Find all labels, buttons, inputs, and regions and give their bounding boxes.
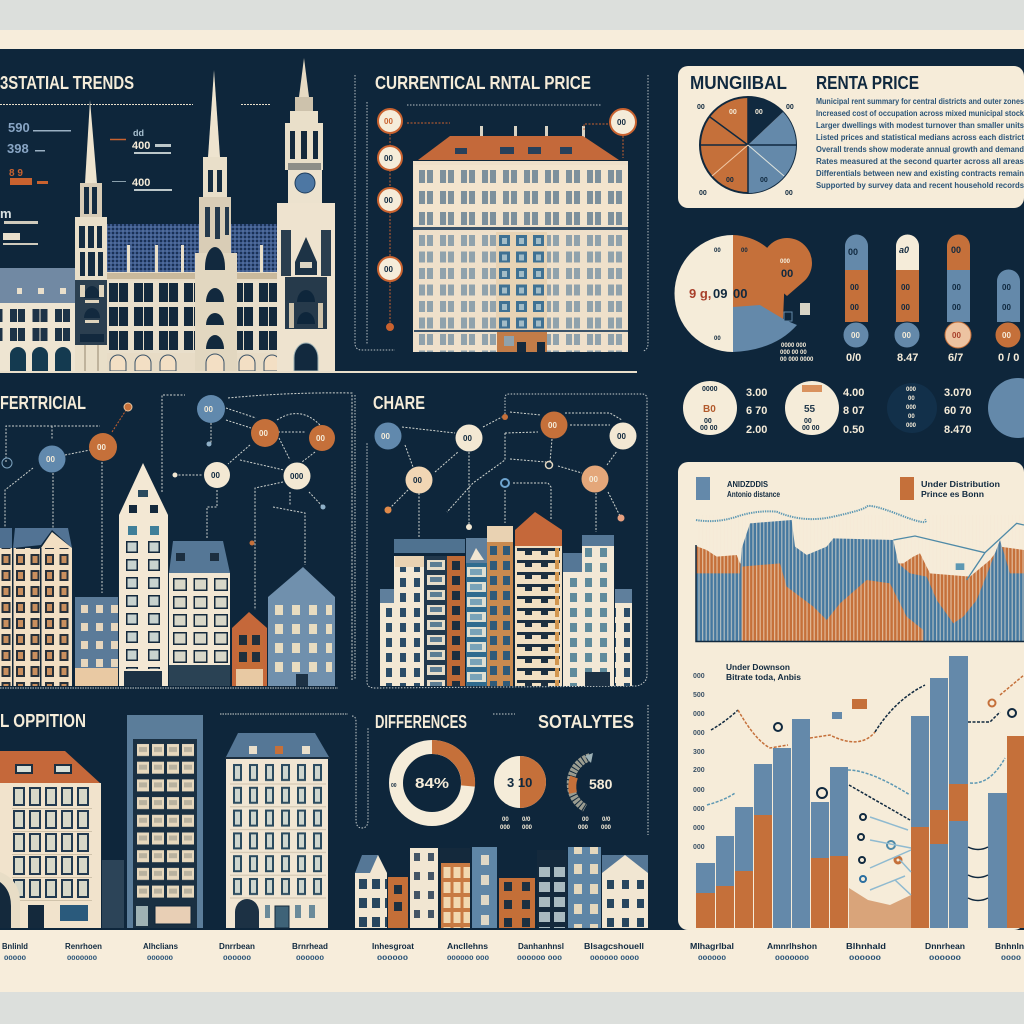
network nodes: 00 [381,432,390,441]
large pie chart: 00 [714,248,721,254]
divider [0,371,637,373]
heading: rental price: RENTA PRICE [816,73,919,93]
y axis labels [693,673,705,851]
network lines [5,393,352,680]
footer captions: 000000 [929,956,962,962]
large pie chart: 00 [733,286,747,301]
y axis labels: 200 [693,767,705,774]
footer captions: Dnnrhean [925,942,965,951]
small dark annex [102,860,124,928]
stat circle 1 [683,381,767,436]
callout markers [378,109,636,330]
pie chart: 00 [697,104,705,111]
mini skyline [355,847,648,928]
network nodes: 00 [316,434,325,443]
chart sub heading [726,663,802,682]
skyline: center buildings [380,512,632,686]
callout markers: 00 [384,265,393,274]
half pie chart: 3 10 [507,775,532,790]
y axis labels: 000 [693,844,705,851]
pill chart 3: 00 [952,331,961,340]
donut chart: 00 [391,783,397,789]
network nodes: 00 [46,455,55,464]
stacked bar chart [696,656,1024,928]
pill chart 4 [995,270,1021,364]
large pie chart: 00 [741,248,748,254]
pill chart 4: 00 [1002,303,1011,312]
large pie chart: 0000 000 [781,343,807,349]
stat circle 1: 0000 [702,386,718,393]
skyline: left buildings [0,463,338,688]
stat circle 3: 00 [908,396,915,402]
stat circle 2: 00 00 [802,425,820,432]
stat circle 1: 00 00 [700,425,718,432]
footer captions: Bnhnln [995,942,1024,951]
footer captions: Mlhagrlbal [690,942,734,951]
paragraph: Rates measured at the second quarter across all areas [816,157,1024,166]
stat list: 8 9 [9,168,23,179]
panel: estatal trends [0,58,637,373]
chart sub heading: Bitrate toda, Anbis [726,673,802,682]
middle tower [195,70,237,372]
footer captions: Blhnhald [846,942,886,951]
pill chart 4: 00 [1002,283,1011,292]
frame lines [352,714,515,828]
icon: clock [295,173,315,193]
paragraph [816,97,1024,190]
stat list: m [0,206,12,221]
stripe overlay [696,515,1024,641]
y axis labels: 000 [693,730,705,737]
stat circle 3: 60 70 [944,405,972,417]
large pie chart: 9 g, [689,286,711,301]
pill chart 4: 00 [1002,331,1011,340]
callout markers: 00 [617,118,626,127]
legend: Under Distribution [921,480,1000,489]
large pie chart [674,235,814,363]
panel: current rental price [355,73,648,352]
footer captions: Inhesgroat [372,942,414,951]
stat circle 1: 3.00 [746,387,767,399]
stat circle 3: 000 [906,423,917,429]
pill chart 2 [894,234,920,364]
footer captions: 000000 [223,956,252,962]
pie chart: 00 [699,190,707,197]
footer captions: 000000 000 [447,956,490,962]
panel: differences and totals [352,705,648,928]
pie chart: 00 [760,177,768,184]
heading: opposition: L OPPITION [0,711,86,731]
stat circle 2: 8 07 [843,405,864,417]
trend markers [774,699,1016,900]
y axis labels: 500 [693,692,705,699]
network nodes: 00 [204,405,213,414]
pill chart 2: 00 [901,283,910,292]
half pie chart [494,756,546,831]
callout markers: 00 [384,196,393,205]
pill chart 2: 8.47 [897,352,918,364]
footer captions: Ancllehns [447,942,489,951]
network nodes: 00 [413,476,422,485]
frame lines [355,394,647,688]
dashed line [220,713,348,715]
y axis labels: 000 [693,673,705,680]
panel: municipal rental price [678,66,1024,208]
legend: ANIDZDDIS [727,480,769,489]
central apartment block [413,126,628,352]
footer captions: Danhanhnsl [518,942,564,951]
legend: Antonio distance [727,490,780,499]
stat list: 400 [132,177,150,189]
pill chart 1: 00 [850,283,859,292]
footer captions: 000000 [147,956,174,962]
stat circle 2: 4.00 [843,387,864,399]
footer captions: 000000 [698,956,727,962]
pie chart [697,97,796,197]
network nodes: 000 [290,472,304,481]
stat circle 1: 2.00 [746,424,767,436]
footer captions: 000000 [296,956,325,962]
donut chart: 84% [415,775,449,792]
pill chart 3: 00 [951,245,961,255]
left annex building [0,268,75,372]
stat circle 2 [785,381,864,436]
stat circle 3 [887,383,972,436]
pill chart 1: 00 [848,247,858,257]
paragraph: Differentials between new and existing contracts remain [816,169,1024,178]
pie chart: 00 [726,177,734,184]
pill chart 3: 00 [952,283,961,292]
pill chart 3: 6/7 [948,352,963,364]
y axis labels: 000 [693,787,705,794]
stat circle 1: 6 70 [746,405,767,417]
large pie chart: 000 00 00 [780,350,807,356]
stat circle 3: 3.070 [944,387,972,399]
half pie chart: 000 [500,825,511,831]
footer captions: Amnrlhshon [767,942,817,951]
legend [696,477,1000,500]
pie chart: 00 [729,109,737,116]
stat circle 3: 000 [906,405,917,411]
network nodes [2,395,335,546]
panel: chart area [678,462,1024,930]
gauge chart: 000 [601,825,612,831]
pie chart: 00 [755,109,763,116]
stat circle 3: 00 [908,414,915,420]
y axis labels: 300 [693,749,705,756]
pill chart 3: 00 [952,303,961,312]
gauge chart: 580 [589,776,613,792]
large pie chart: 00 [781,268,793,280]
stat circle 3: 8.470 [944,424,972,436]
striped area chart fills [696,520,1024,642]
frame lines [355,75,648,351]
y axis labels: 000 [693,825,705,832]
footer captions: 0000000 [67,956,98,962]
stat list: 400 [132,140,150,152]
area chart trend lines [696,506,1024,580]
pill chart 4: 0 / 0 [998,352,1019,364]
large pie chart: 000 [780,259,791,265]
half pie chart: 0/0 [522,817,531,823]
footer captions: Alhclians [143,942,179,951]
footer captions: Renrhoen [65,942,102,951]
stat list [0,104,271,245]
town hall facade [106,245,280,372]
large pie chart: 09 [713,286,727,301]
large pie chart: 00 [714,336,721,342]
chart baseline [696,545,1024,642]
stat list: 398 [7,141,29,156]
gauge chart: 000 [578,825,589,831]
stat circle 3: 000 [906,387,917,393]
footer captions: Brnrhead [292,942,328,951]
footer captions: 000000 [849,956,882,962]
heading: differences: DIFFERENCES [375,712,467,732]
town hall roof [106,224,278,272]
footer captions [2,942,1024,962]
footer captions: Bnlinld [2,942,28,951]
pie chart: 00 [785,190,793,197]
network nodes: 00 [589,475,598,484]
panel: chare network and skyline [355,393,647,688]
footer captions: 0000 [1001,956,1022,962]
pill chart 3 [945,234,971,364]
stat circle 1: 00 [704,418,712,425]
heading: current rental price: CURRENTICAL RNTAL PRICE [375,73,591,93]
network nodes: 00 [259,429,268,438]
footer captions: 000000 [377,956,409,962]
footer captions: 000000 000 [517,956,563,962]
pill chart 2: 00 [901,303,910,312]
network nodes: 00 [211,471,220,480]
footer captions: Dnrrbean [219,942,255,951]
building: orange-roof block [0,751,101,928]
hill illustration [849,888,911,928]
chart sub heading: Under Downson [726,663,790,672]
half pie chart: 000 [522,825,533,831]
footer captions: Blsagcshouell [584,942,644,951]
pill chart 2: 00 [902,331,911,340]
pill chart 1: 00 [850,303,859,312]
pill chart 1: 00 [851,331,860,340]
pie chart: 00 [786,104,794,111]
y axis labels: 000 [693,806,705,813]
heading: municipal: MUNGIIBAL [690,73,787,93]
y axis labels: 000 [693,711,705,718]
stat circle 2: 55 [804,404,816,415]
gauge chart: 00 [582,817,589,823]
pill chart 2: a0 [899,245,909,255]
network nodes: 00 [463,434,472,443]
footer captions: 00000 [4,956,27,962]
legend: Prince es Bonn [921,490,984,499]
pill chart 1 [843,234,869,364]
stat circle 2: 0.50 [843,424,864,436]
building: dark tower [127,715,203,928]
stat circle 1: B0 [703,404,716,415]
footer captions: 0000000 [775,956,810,962]
network lines [388,412,622,537]
trend lines [707,675,1024,820]
heading: sotalytes: SOTALYTES [538,712,634,732]
heading: estatal trends: 3STATIAL TRENDS [0,73,134,93]
panel: fertricial network and skyline [0,393,352,688]
pill chart 1: 0/0 [846,352,861,364]
large pie chart: 00 000 0000 [780,357,814,363]
heading: fertricial: FERTRICIAL [0,393,86,413]
network nodes: 00 [548,421,557,430]
gauge chart [571,753,613,831]
stat list: dd [133,128,144,138]
stat circle 4 [988,378,1024,438]
stat circle 2: 00 [804,418,812,425]
callout markers: 00 [384,117,393,126]
gauge chart: 0/0 [602,817,611,823]
right clock tower [277,58,335,372]
network nodes: 00 [97,443,106,452]
callout markers: 00 [384,154,393,163]
panel: opposition buildings [0,711,348,928]
network nodes [374,412,636,530]
left tower [75,100,107,372]
network nodes: 00 [617,432,626,441]
building: blue-roof block [225,733,330,928]
donut chart [391,747,468,819]
heading: chare: CHARE [373,393,425,413]
footer captions: 000000 0000 [590,956,640,962]
stat list: 590 [8,120,30,135]
half pie chart: 00 [502,817,509,823]
